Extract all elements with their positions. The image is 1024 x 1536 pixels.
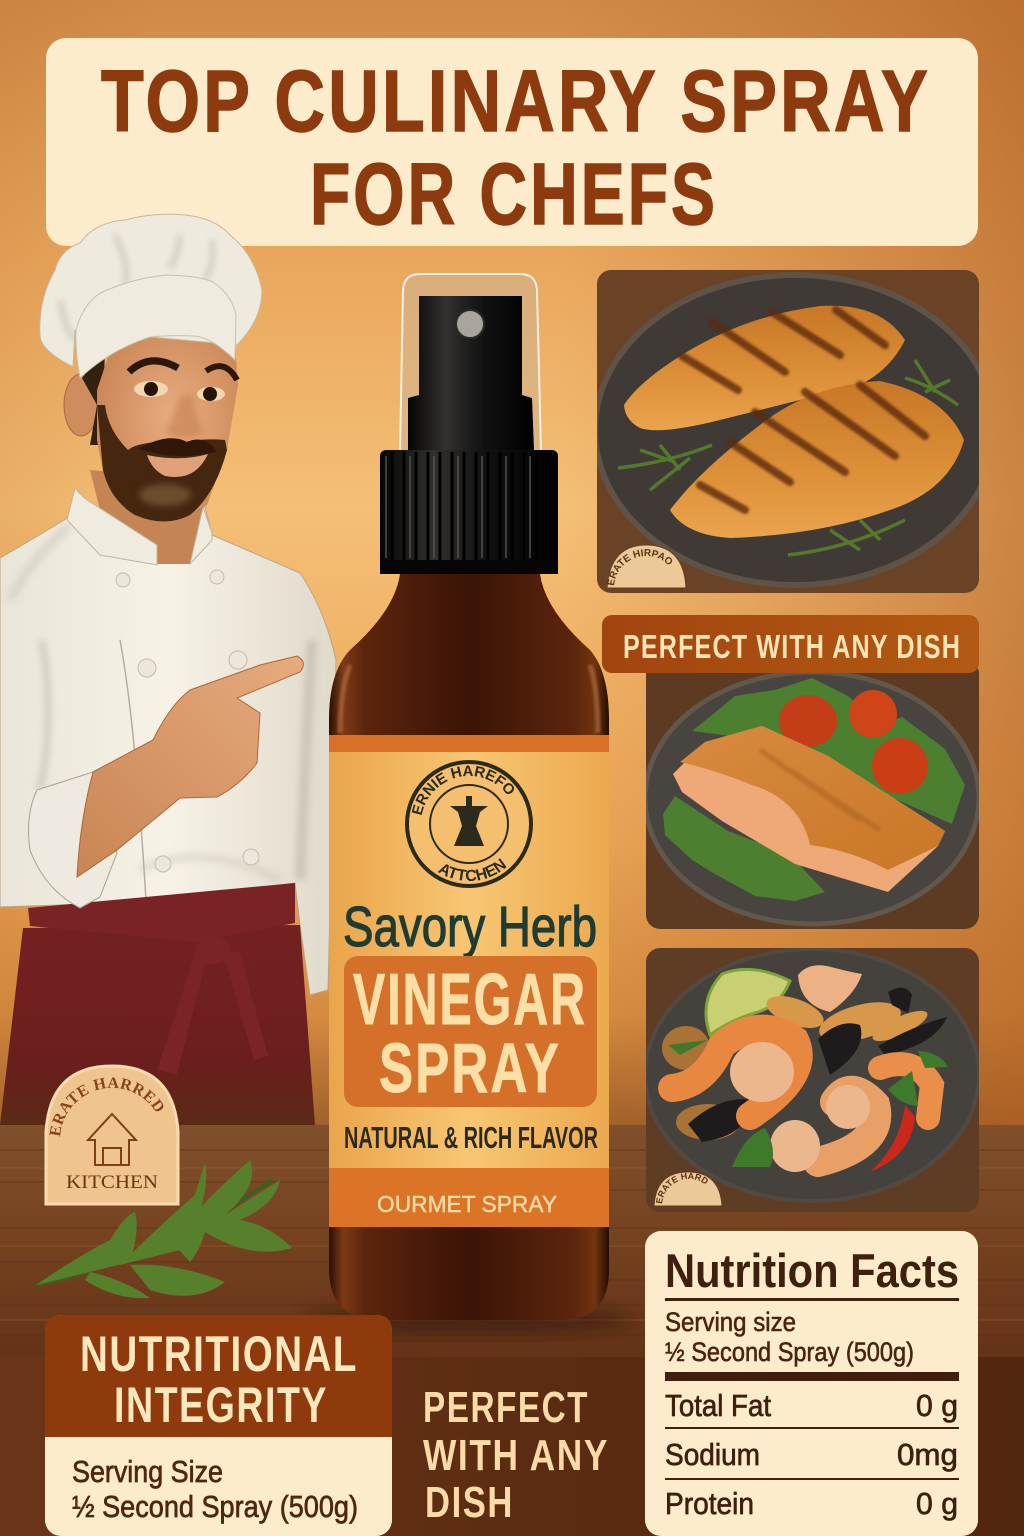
arm and pointing hand — [77, 656, 303, 877]
black mussel shells — [688, 988, 947, 1142]
coat folds — [10, 525, 312, 900]
beard — [97, 405, 227, 522]
badge arc text: ERATE HARRED — [50, 1078, 164, 1137]
panel heading — [80, 1326, 358, 1433]
serving info: ½ Second Spray (500g) — [72, 1489, 358, 1524]
nutrition facts panel — [645, 1231, 978, 1536]
amber glass body — [329, 574, 609, 1320]
lime — [706, 969, 790, 1035]
plate logo 1: ERATE HIRPAO — [608, 549, 672, 586]
serving size: ½ Second Spray (500g) — [665, 1337, 914, 1367]
tomatoes — [779, 695, 837, 747]
lips — [147, 454, 208, 477]
perfect with any dish text: DISH — [425, 1478, 514, 1527]
plate — [645, 672, 979, 924]
chef illustration — [0, 214, 336, 1125]
panel heading: INTEGRITY — [114, 1377, 328, 1433]
rosemary garnish — [618, 360, 958, 555]
label bottom band: OURMET SPRAY — [377, 1191, 557, 1217]
row: total fat: Total Fat — [665, 1388, 771, 1423]
plate — [595, 275, 995, 585]
food photo: salmon — [645, 660, 979, 929]
eyes — [129, 361, 237, 401]
nose shadow — [165, 395, 203, 438]
spray head — [408, 296, 534, 450]
salad — [663, 678, 965, 901]
ribbed collar — [380, 450, 558, 574]
title second line: FOR CHEFS — [310, 146, 718, 243]
title panel — [46, 38, 978, 246]
badge label: KITCHEN — [66, 1172, 158, 1193]
serving info — [72, 1454, 358, 1524]
row: sodium — [665, 1437, 958, 1472]
row: protein — [665, 1486, 958, 1521]
row: total fat — [665, 1388, 958, 1423]
nutrition heading: Nutrition Facts — [665, 1244, 959, 1297]
perfect with any dish text — [423, 1383, 609, 1527]
glass highlights — [340, 665, 598, 733]
serving info: Serving Size — [72, 1454, 223, 1489]
row: sodium: 0mg — [897, 1437, 958, 1472]
buttons — [116, 570, 259, 872]
neck — [90, 470, 205, 564]
ear — [64, 374, 98, 436]
panel heading: NUTRITIONAL — [80, 1326, 358, 1382]
hat band — [76, 275, 236, 378]
coat — [0, 507, 336, 995]
label — [329, 735, 609, 1225]
hat — [40, 214, 262, 378]
clear cap — [400, 274, 541, 452]
perfect with any dish text: WITH ANY — [423, 1431, 609, 1480]
apron band — [28, 883, 295, 942]
row: sodium: Sodium — [665, 1437, 760, 1472]
rolled cuff — [29, 772, 117, 908]
bottle shadow — [305, 1306, 635, 1334]
logo seal — [405, 760, 533, 888]
main shrimp — [672, 1029, 932, 1162]
wooden badge — [44, 1064, 180, 1206]
chicken breast 2 — [670, 381, 964, 538]
serving size — [665, 1307, 914, 1367]
food photo: grilled chicken — [595, 270, 995, 593]
apron — [0, 925, 315, 1125]
face — [97, 332, 238, 523]
tagline: NATURAL & RICH FLAVOR — [344, 1120, 598, 1155]
nozzle — [456, 310, 484, 338]
hair — [82, 350, 105, 445]
serving size: Serving size — [665, 1307, 796, 1337]
salmon crust — [680, 726, 945, 870]
vinegar spray panel: VINEGAR — [353, 960, 587, 1040]
salmon fillet — [673, 726, 945, 892]
chicken breast 1 — [624, 306, 905, 430]
shrimp body — [730, 1042, 870, 1172]
row: protein: 0 g — [916, 1486, 958, 1521]
garnish — [870, 1105, 915, 1172]
vinegar spray panel: SPRAY — [379, 1029, 561, 1107]
panel: nutritional integrity — [45, 1315, 392, 1536]
apron ties — [157, 936, 268, 1074]
moustache — [138, 438, 217, 456]
plate — [645, 949, 979, 1201]
badge house — [88, 1114, 136, 1165]
perfect with any dish text: PERFECT — [423, 1383, 589, 1432]
logo seal: ERNIE HAREFO — [412, 766, 514, 815]
label bottom band — [329, 1168, 609, 1227]
vinegar spray panel — [344, 956, 597, 1107]
product name: Savory Herb — [343, 895, 597, 959]
collar — [67, 488, 212, 565]
beard highlight — [139, 484, 191, 506]
food photo: seafood — [645, 948, 979, 1212]
plate logo 3: ERATE HARD — [656, 1172, 708, 1204]
ribbon: perfect with any dish — [602, 615, 979, 673]
spray bottle — [329, 273, 609, 1320]
row: protein: Protein — [665, 1486, 754, 1521]
row: total fat: 0 g — [916, 1388, 958, 1423]
golden mussels — [662, 990, 931, 1140]
grill marks — [682, 310, 925, 510]
top shrimp — [798, 965, 862, 1012]
wooden table — [0, 1125, 1024, 1536]
herb sprig — [36, 1160, 292, 1298]
logo seal: ATTCHEN — [438, 858, 506, 881]
